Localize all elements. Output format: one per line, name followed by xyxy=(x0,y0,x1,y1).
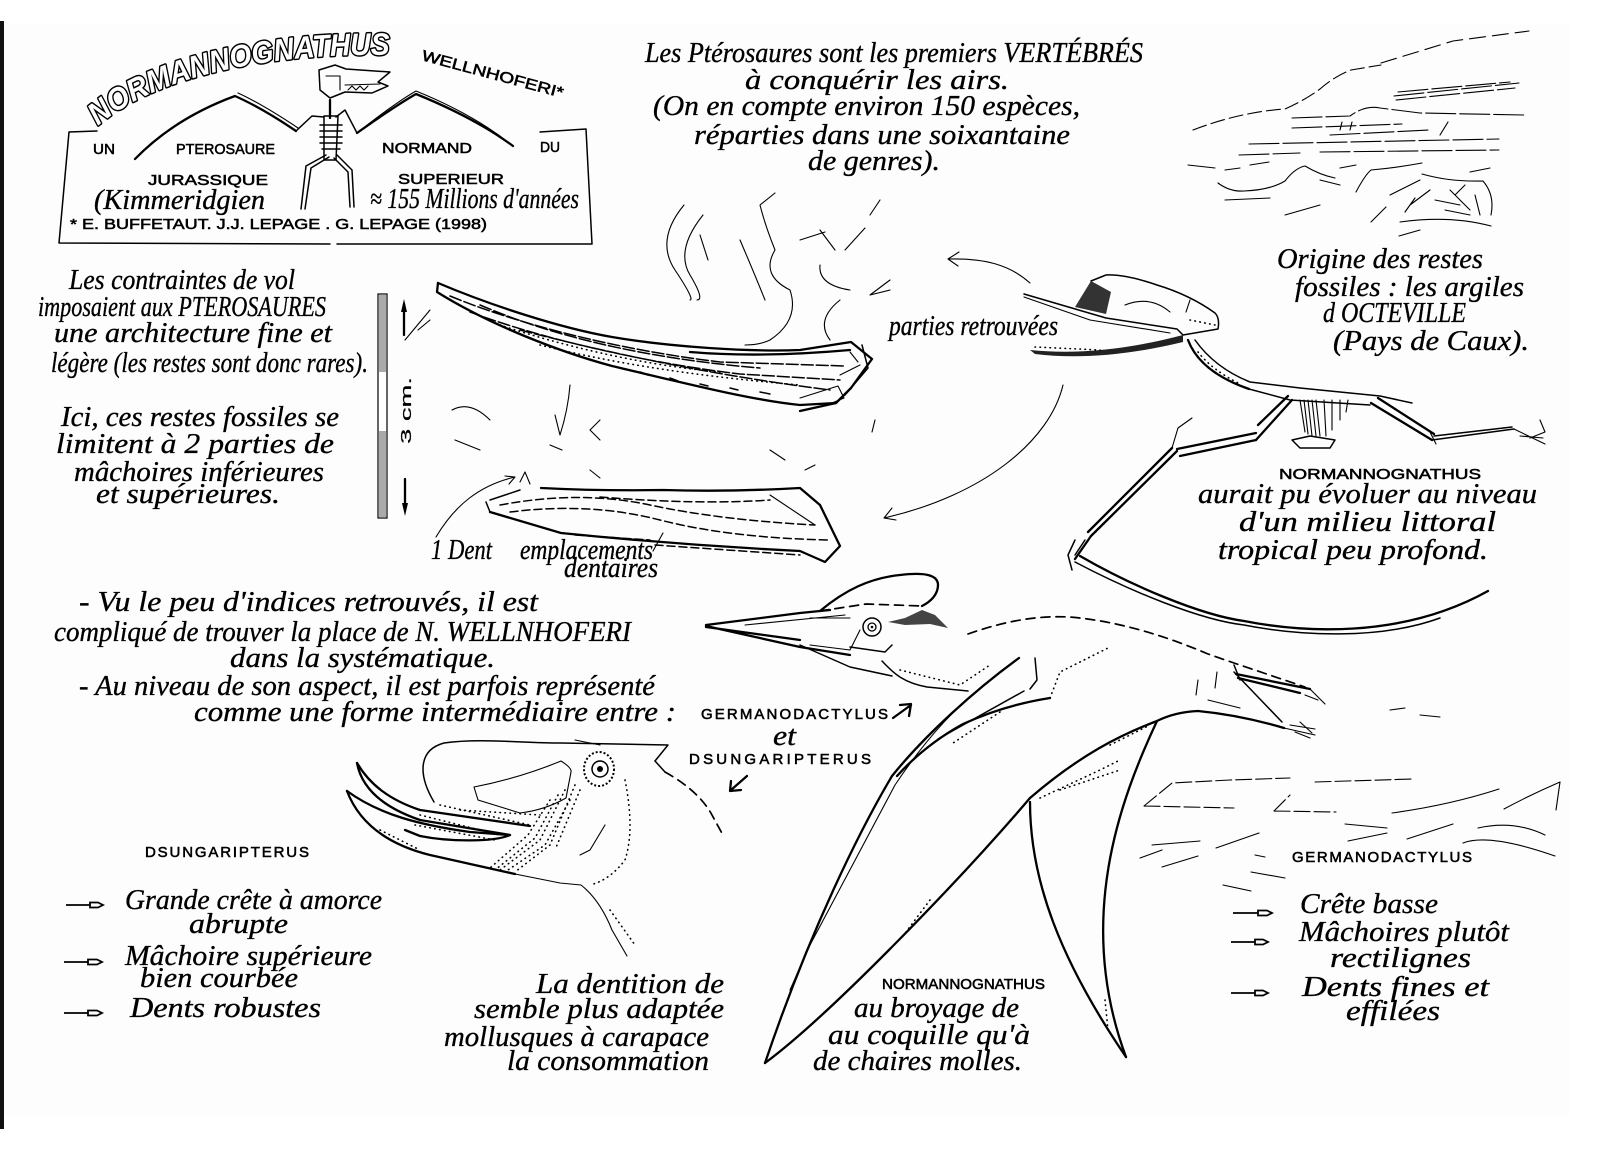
eye xyxy=(863,618,881,636)
subtitle: wellnhoferi: WELLNHOFERI* xyxy=(420,47,566,102)
frame text: UN xyxy=(93,141,115,158)
label: germanodactylus et dsungaripterus: et xyxy=(773,721,797,752)
list: dsungaripterus traits xyxy=(64,844,382,1024)
label: tooth and dental sockets: emplacements xyxy=(520,535,653,566)
intro text: (On en compte environ 150 espèces, xyxy=(653,91,1080,122)
text: dentition: la consommation xyxy=(507,1046,709,1077)
frame text: DU xyxy=(540,139,560,156)
neck and back xyxy=(968,617,1305,687)
list: dsungaripterus traits: DSUNGARIPTERUS xyxy=(145,844,309,861)
label: germanodactylus et dsungaripterus xyxy=(689,704,911,791)
list: dsungaripterus traits: Mâchoire supérieure xyxy=(124,941,372,972)
text: origin of fossils: (Pays de Caux). xyxy=(1333,326,1529,357)
rock outlines around fossil xyxy=(405,193,890,470)
drawing: germanodactylus full body xyxy=(706,574,1325,1063)
label: tooth and dental sockets: dentaires xyxy=(564,553,658,584)
intro text: réparties dans une soixantaine xyxy=(694,120,1070,151)
frame text: PTEROSAURE xyxy=(176,141,275,158)
list: dsungaripterus traits: Dents robustes xyxy=(129,993,321,1024)
list: germanodactylus traits: Mâchoires plutôt xyxy=(1298,917,1510,948)
text: origin of fossils: d OCTEVILLE xyxy=(1323,298,1466,329)
skeleton: normannognathus xyxy=(1024,275,1545,634)
arrow bullet xyxy=(64,1010,102,1016)
text: flight constraints: Les contraintes de vol xyxy=(68,265,295,296)
arrow bullet xyxy=(66,902,103,908)
label: germanodactylus et dsungaripterus: DSUNGARIPTERUS xyxy=(689,751,871,768)
landscape: lower right xyxy=(1140,708,1560,891)
arrow bullet xyxy=(1231,940,1268,944)
label: germanodactylus et dsungaripterus: GERMANODACTYLUS xyxy=(701,706,888,723)
text: dentition: mollusques à carapace xyxy=(444,1022,709,1053)
intro text: Les Ptérosaures sont les premiers VERTÉBRÉS xyxy=(644,38,1143,69)
text: systematics: - Vu le peu d'indices retrouvés, il est xyxy=(79,587,539,618)
text: systematics: dans la systématique. xyxy=(230,643,495,674)
text: flight constraints: imposaient aux PTEROSAURES xyxy=(38,292,326,323)
text: origin of fossils xyxy=(1277,244,1529,357)
text: systematics: comme une forme intermédiaire entre : xyxy=(194,697,676,728)
fossil: upper jaw fragment xyxy=(405,193,890,470)
frame text: * E. BUFFETAUT. J.J. LEPAGE . G. LEPAGE (1998) xyxy=(70,216,487,233)
text: flight constraints: Ici, ces restes fossiles se xyxy=(60,402,339,433)
text: flight constraints: une architecture fine et xyxy=(54,318,333,349)
text: origin of fossils: Origine des restes xyxy=(1277,244,1483,275)
text: dentition: au coquille qu'à xyxy=(828,1020,1030,1051)
text: habitat: aurait pu évoluer au niveau xyxy=(1198,479,1537,510)
eye xyxy=(584,752,614,786)
text: flight constraints: légère (les restes sont donc rares). xyxy=(51,348,368,379)
list: germanodactylus traits: GERMANODACTYLUS xyxy=(1292,849,1472,866)
list: dsungaripterus traits: bien courbée xyxy=(140,963,298,994)
frame text xyxy=(70,139,579,233)
frame text: NORMAND xyxy=(382,140,472,157)
list: dsungaripterus traits: Grande crête à amorce xyxy=(125,885,382,916)
text: systematics: compliqué de trouver la place de N. WELLNHOFERI xyxy=(54,617,633,648)
text: systematics: - Au niveau de son aspect, il est parfois représenté xyxy=(79,671,657,702)
list: dsungaripterus traits: abrupte xyxy=(189,909,288,940)
intro text xyxy=(644,38,1143,177)
scan edge bar xyxy=(0,21,4,1129)
arrow bullet xyxy=(64,960,102,964)
landscape: top right xyxy=(1188,31,1529,236)
crest xyxy=(820,574,938,611)
text: systematics xyxy=(54,587,676,728)
scale bar xyxy=(378,294,415,518)
arrow: to lower fossil xyxy=(884,385,1063,520)
text: habitat xyxy=(1198,466,1537,566)
list: germanodactylus traits: Dents fines et xyxy=(1301,972,1490,1003)
text: flight constraints: mâchoires inférieures xyxy=(74,457,324,488)
intro text: à conquérir les airs. xyxy=(745,65,1009,96)
text: habitat: NORMANNOGNATHUS xyxy=(1279,466,1481,483)
text: dentition: NORMANNOGNATHUS xyxy=(882,976,1045,993)
label: tooth and dental sockets: 1 Dent xyxy=(431,535,493,566)
list: germanodactylus traits xyxy=(1231,849,1510,1027)
wing and body edges xyxy=(765,658,1019,1063)
text: flight constraints: et supérieures. xyxy=(96,479,280,510)
text: habitat: tropical peu profond. xyxy=(1218,535,1488,566)
text: habitat: d'un milieu littoral xyxy=(1239,507,1496,538)
right wing bones xyxy=(1371,398,1545,444)
drawing: dsungaripterus head xyxy=(347,740,724,956)
title panel xyxy=(58,32,593,245)
frame text: (Kimmeridgien xyxy=(94,185,265,216)
intro text: de genres). xyxy=(808,146,940,177)
list: germanodactylus traits: Crête basse xyxy=(1300,889,1438,920)
skull xyxy=(1024,275,1219,356)
text: flight constraints xyxy=(38,265,368,510)
list: germanodactylus traits: rectilignes xyxy=(1330,943,1471,974)
title frame xyxy=(59,129,592,244)
frame text: JURASSIQUE xyxy=(148,172,268,189)
text: origin of fossils: fossiles : les argiles xyxy=(1295,272,1524,303)
title: Normannognathus: NORMANNOGNATHUS xyxy=(86,32,391,127)
text: flight constraints: limitent à 2 parties de xyxy=(56,429,334,460)
text: dentition xyxy=(444,969,1045,1077)
list: germanodactylus traits: effilées xyxy=(1346,996,1440,1027)
neck and body xyxy=(1188,340,1412,448)
frame text: SUPERIEUR xyxy=(398,171,504,188)
text: dentition: de chaires molles. xyxy=(813,1046,1022,1077)
frame text: ≈ 155 Millions d'années xyxy=(370,184,579,215)
hind legs and feet xyxy=(1234,665,1282,722)
arrow bullet xyxy=(1231,990,1268,996)
beak xyxy=(706,610,850,655)
skeleton drawing xyxy=(135,65,513,209)
text: dentition: La dentition de xyxy=(535,969,724,1000)
left wing bones xyxy=(1068,396,1488,634)
arrow: to upper fossil xyxy=(948,252,1030,283)
text: dentition: au broyage de xyxy=(854,993,1019,1024)
fossil: lower jaw fragment xyxy=(486,470,840,562)
label: tooth and dental sockets xyxy=(431,476,663,584)
text: dentition: semble plus adaptée xyxy=(474,994,724,1025)
scale bar: 3 cm. xyxy=(398,377,415,444)
arrow bullet xyxy=(1233,910,1272,916)
label: parties retrouvées: parties retrouvées xyxy=(887,311,1058,342)
